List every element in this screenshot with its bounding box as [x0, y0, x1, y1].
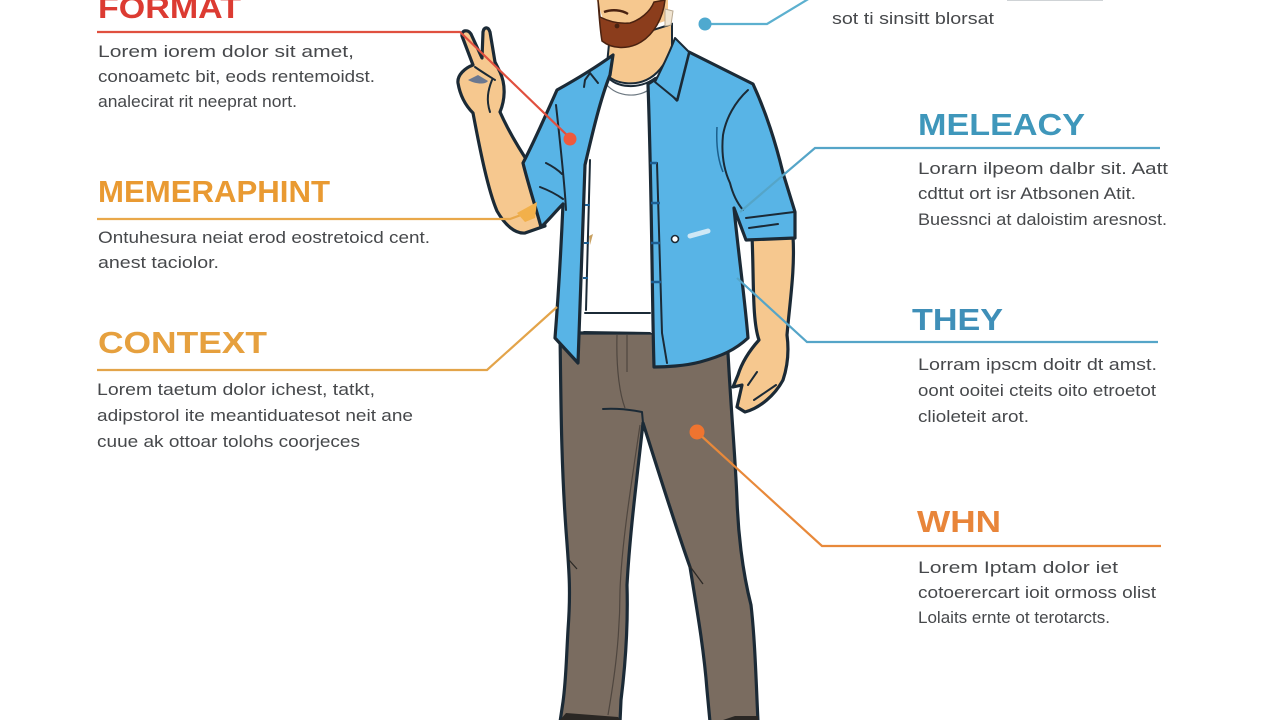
body: they: clioleteit arot. — [918, 407, 1029, 426]
text block: meleacy — [918, 107, 1168, 229]
text block: format — [98, 0, 375, 111]
leader line: they — [737, 278, 1158, 342]
text block: they — [912, 302, 1157, 426]
body: context: cuue ak ottoar tolohs coorjeces — [97, 432, 360, 451]
body: whn — [918, 558, 1156, 627]
body: whn: Lolaits ernte ot terotarcts. — [918, 608, 1110, 627]
leader line: context — [97, 307, 557, 370]
body: format — [98, 42, 375, 111]
leader line: top right with dot — [698, 0, 1103, 30]
body: context — [97, 380, 413, 451]
body: format: analecirat rit neeprat nort. — [98, 92, 297, 111]
body: they — [918, 355, 1157, 426]
shirt right panel and sleeve — [648, 38, 795, 367]
white t-shirt — [584, 76, 655, 333]
shirt left panel and sleeve — [523, 55, 613, 363]
heading: context: CONTEXT — [98, 325, 267, 360]
left arm raised with hand — [458, 28, 545, 233]
leader line: whn with dot — [690, 424, 1161, 546]
body: whn: cotoerercart ioit ormoss olist — [918, 583, 1156, 602]
heading: meleacy: MELEACY — [918, 107, 1085, 142]
body: memeraphint: Ontuhesura neiat erod eostretoicd cent. — [98, 228, 430, 247]
shoes — [560, 713, 758, 720]
leader line: meleacy — [740, 148, 1160, 212]
body: context: Lorem taetum dolor ichest, tatkt, — [97, 380, 375, 399]
body: they: Lorram ipscm doitr dt amst. — [918, 355, 1157, 374]
beard and face — [596, 0, 673, 48]
body: memeraphint: anest taciolor. — [98, 253, 219, 272]
body: meleacy — [918, 159, 1168, 229]
text block: memeraphint — [98, 174, 430, 272]
trousers — [560, 333, 758, 720]
leader line: memeraphint — [97, 202, 593, 245]
body: format: Lorem iorem dolor sit amet, — [98, 42, 354, 61]
text block: whn — [917, 504, 1156, 627]
body: format: conoametc bit, eods rentemoidst. — [98, 67, 375, 86]
body: meleacy: Lorarn ilpeom dalbr sit. Aatt — [918, 159, 1168, 178]
right arm with hand — [733, 236, 793, 412]
body: memeraphint — [98, 228, 430, 272]
heading: memeraphint: MEMERAPHINT — [98, 174, 330, 209]
body: context: adipstorol ite meantiduatesot neit ane — [97, 406, 413, 425]
body: meleacy: Buessnci at daloistim aresnost. — [918, 210, 1167, 229]
body: whn: Lorem Iptam dolor iet — [918, 558, 1118, 577]
leader line: format — [97, 32, 576, 146]
heading: they: THEY — [912, 302, 1003, 337]
text block: top right fragment: sot ti sinsitt blorsat — [832, 9, 994, 28]
central figure: man in blue shirt — [458, 0, 795, 720]
heading: whn: WHN — [917, 504, 1001, 539]
text block: context — [97, 325, 413, 451]
neck — [606, 24, 672, 83]
body: meleacy: cdttut ort isr Atbsonen Atit. — [918, 184, 1136, 203]
body: they: oont ooitei cteits oito etroetot — [918, 381, 1156, 400]
